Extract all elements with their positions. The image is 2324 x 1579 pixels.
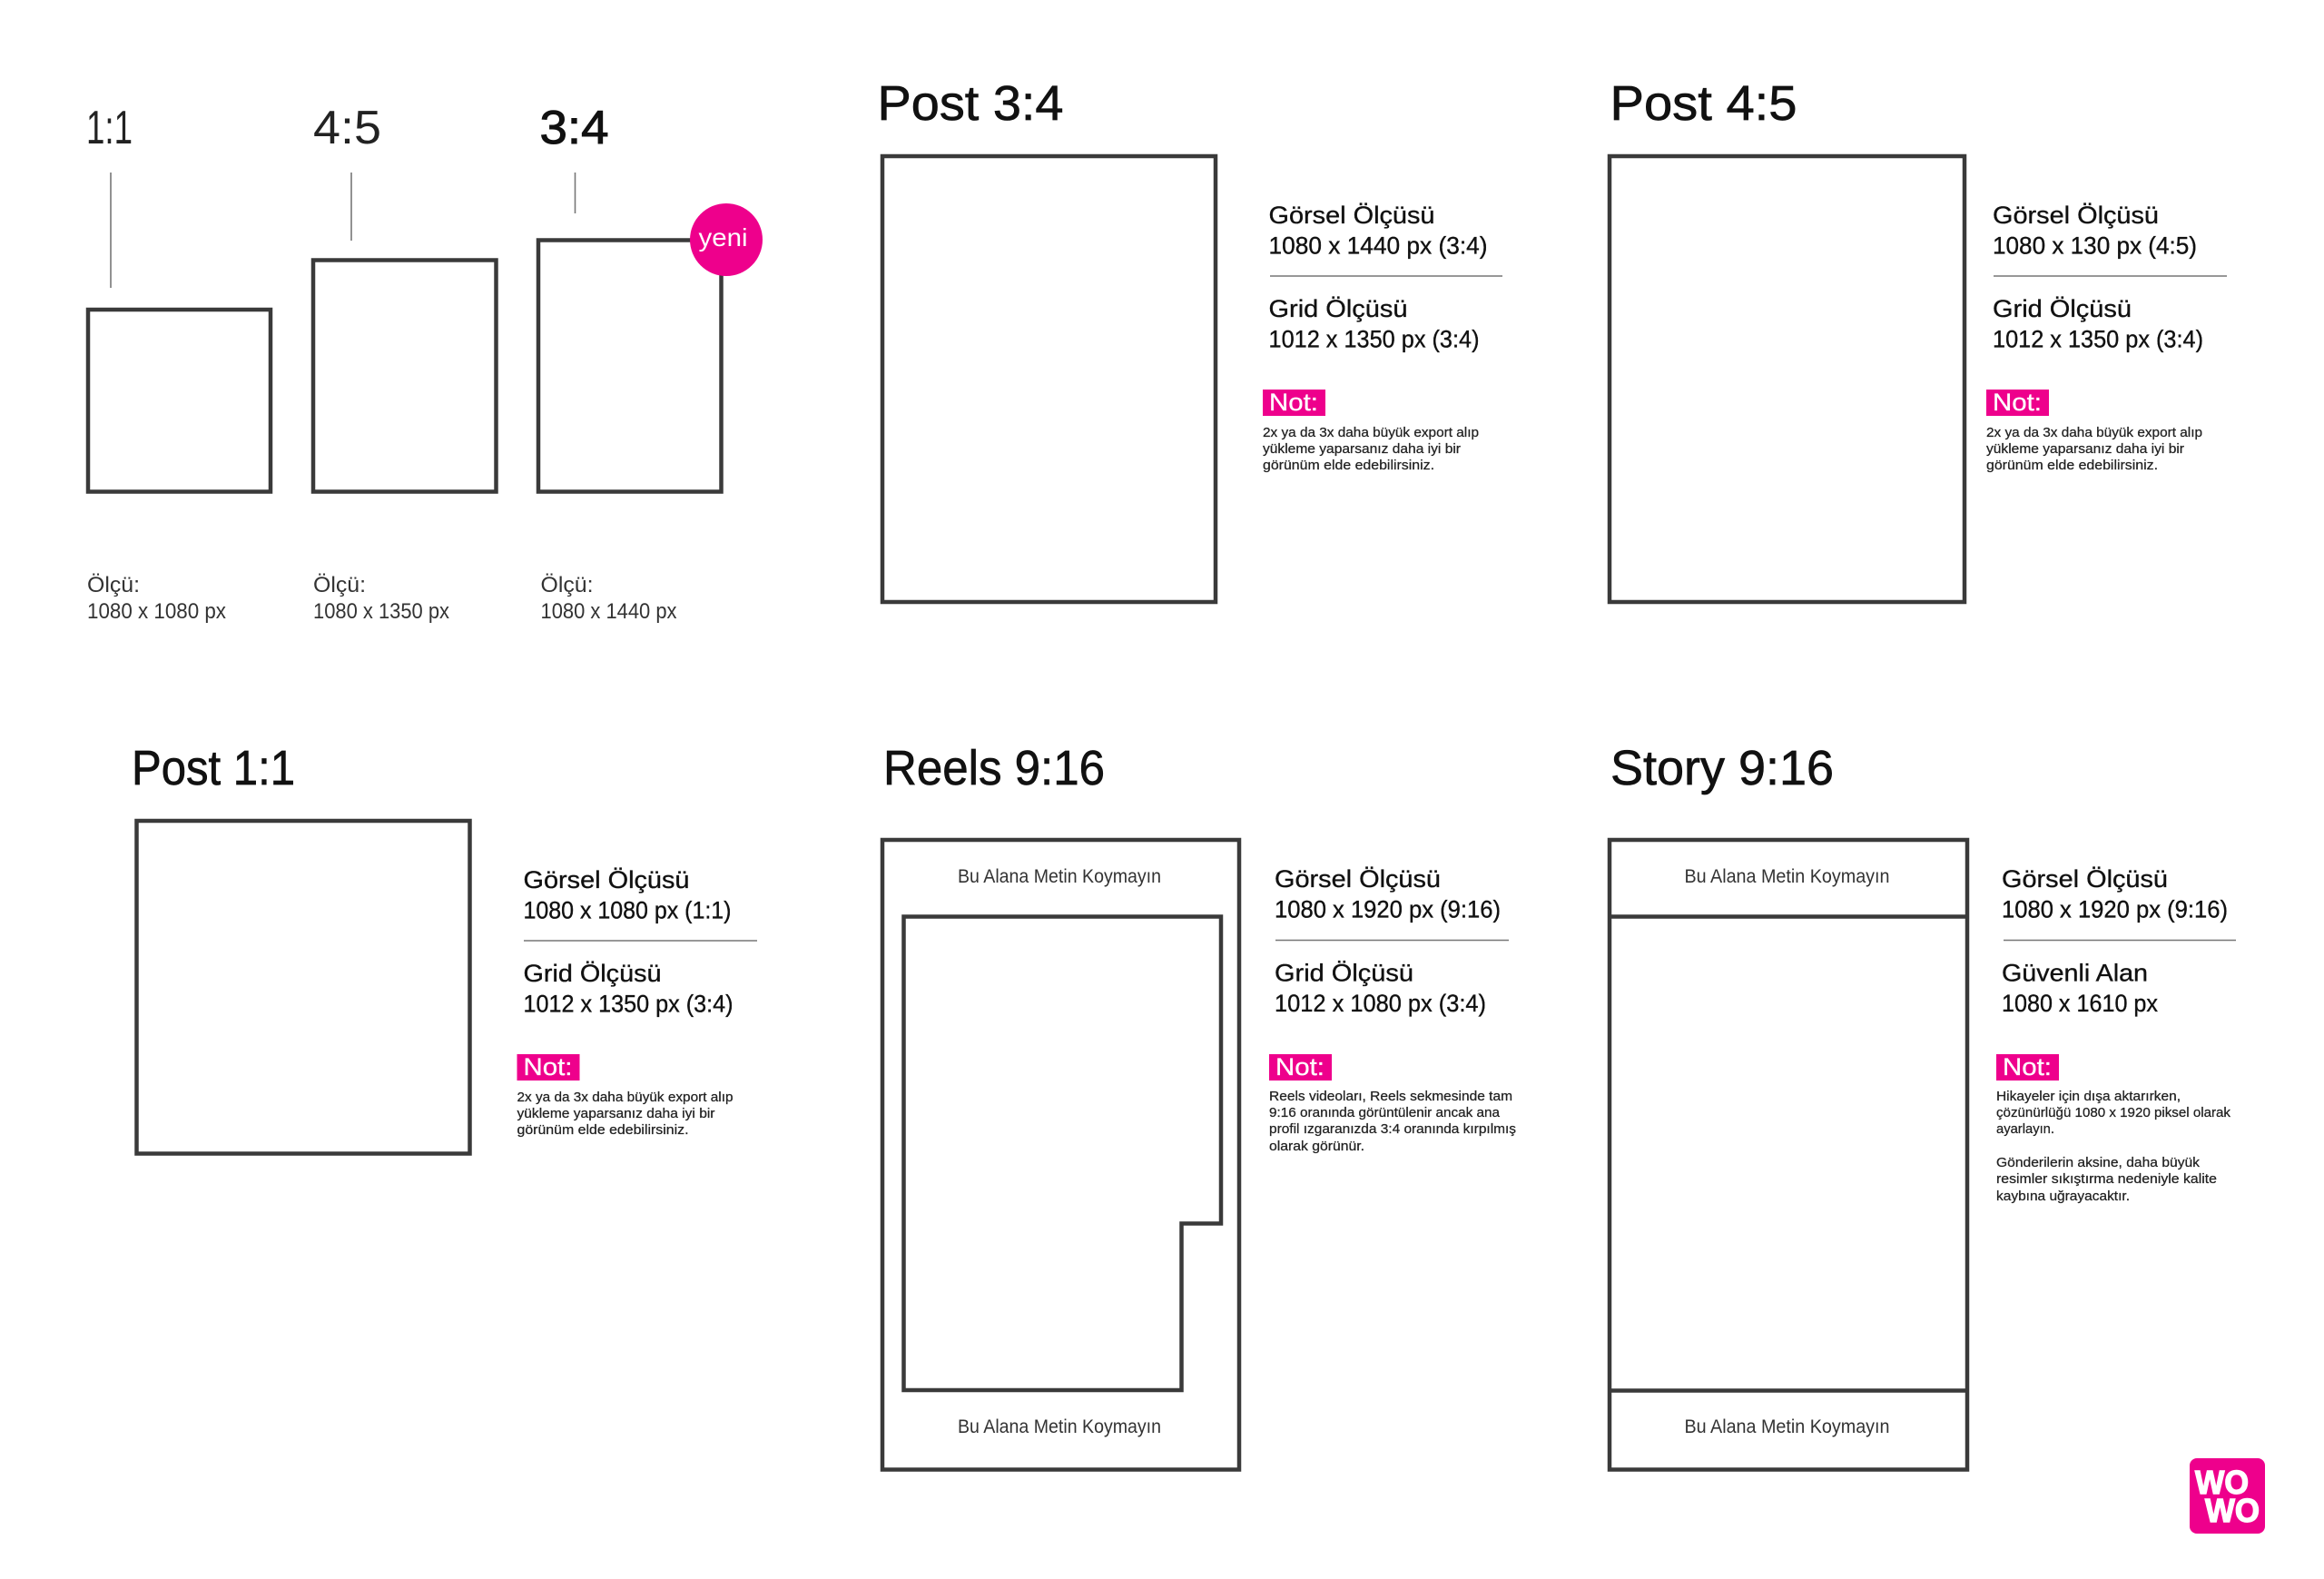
specs: Post 3:4 [1269,202,1502,352]
specs: Reels 9:16: Görsel Ölçüsü [1275,865,1441,893]
note: Story 9:16: Gönderilerin aksine, daha büyük [1996,1155,2201,1170]
specs: Post 4:5: 1012 x 1350 px (3:4) [1993,325,2203,352]
size text: 1:1 [87,573,226,624]
specs: Post 1:1: Görsel Ölçüsü [523,866,690,893]
note: Post 1:1: yükleme yaparsanız daha iyi bir [517,1106,715,1121]
note: Post 1:1: görünüm elde edebilirsiniz. [517,1122,688,1138]
badge: yeni [690,203,763,276]
note: Post 4:5: yükleme yaparsanız daha iyi bir [1986,441,2184,457]
frame: Reels safe area [904,917,1221,1390]
specs: Story 9:16: Güvenli Alan [2002,959,2148,986]
frame: Post 4:5 [1610,156,1965,602]
note: Reels 9:16: olarak görünür. [1269,1139,1364,1154]
note: Reels 9:16: 9:16 oranında görüntülenir ancak ana [1269,1105,1501,1120]
frame: Story safe area [1610,917,1967,1391]
specs: Post 4:5: Grid Ölçüsü [1993,295,2132,322]
note: Story 9:16: ayarlayın. [1996,1121,2054,1137]
specs: Post 1:1: 1080 x 1080 px (1:1) [523,897,732,924]
size text: 3:4: Ölçü: [541,573,594,597]
badge: yeni: yeni [699,223,748,252]
logo: WOWO: WO [2195,1464,2249,1501]
specs: Post 3:4: Grid Ölçüsü [1269,295,1407,322]
note: Reels 9:16: Not: [1275,1053,1324,1081]
size text: 4:5: 1080 x 1350 px [313,599,449,624]
note: Story 9:16: Not: [2003,1053,2052,1081]
size text: 1:1: 1080 x 1080 px [87,599,226,624]
size text: 3:4: 1080 x 1440 px [541,599,677,624]
caption: top safe zone: Bu Alana Metin Koymayın [958,866,1161,887]
note: Post 4:5: 2x ya da 3x daha büyük export alıp [1986,425,2202,440]
note: Post 3:4: yükleme yaparsanız daha iyi bir [1263,441,1461,457]
specs: Post 4:5: Görsel Ölçüsü [1993,202,2159,229]
panel: Post 1:1 [132,741,757,1153]
specs: Story 9:16: 1080 x 1920 px (9:16) [2002,895,2228,923]
note: Post 1:1: 2x ya da 3x daha büyük export alıp [517,1090,734,1105]
logo: WOWO [2190,1458,2265,1534]
specs: Reels 9:16 [1275,865,1509,1017]
note: Story 9:16: Hikayeler için dışa aktarırken, [1996,1089,2181,1104]
specs: Post 1:1: Grid Ölçüsü [523,960,661,987]
note: Story 9:16 [1996,1053,2230,1204]
note: Reels 9:16: profil ızgaranızda 3:4 oranında kırpılmış [1269,1121,1516,1137]
note: Post 1:1 [517,1053,734,1138]
specs: Post 3:4: 1012 x 1350 px (3:4) [1269,325,1480,352]
heading: 3:4: 3:4 [539,102,608,154]
size text: 3:4 [541,573,677,624]
note: Reels 9:16 [1269,1053,1516,1154]
specs: Post 3:4: 1080 x 1440 px (3:4) [1269,232,1487,260]
ratio 3:4 column [538,102,763,624]
specs: Post 1:1 [523,866,757,1017]
panel: Post 3:4 [877,76,1502,602]
note: Story 9:16: kaybına uğrayacaktır. [1996,1189,2130,1204]
heading: 1:1: 1:1 [86,102,133,154]
panel: Story 9:16 [1610,741,2236,1469]
specs: Story 9:16: 1080 x 1610 px [2002,990,2158,1017]
note: Post 1:1: Not: [523,1053,572,1081]
frame: 4:5 [313,260,496,492]
frame: Story outer [1610,840,1967,1469]
panel: aspect ratio overview [86,102,763,624]
frame: Post 1:1 [136,821,470,1153]
size text: 4:5 [313,573,449,624]
note: Story 9:16: resimler sıkıştırma nedeniyle kalite [1996,1171,2217,1187]
heading: Post 4:5: Post 4:5 [1610,76,1797,131]
heading: Reels 9:16: Reels 9:16 [883,741,1105,795]
heading: Story 9:16: Story 9:16 [1610,741,1834,795]
panel: Post 4:5 [1610,76,2227,602]
note: Post 4:5: Not: [1993,389,2042,416]
specs: Reels 9:16: Grid Ölçüsü [1275,959,1413,986]
frame: Reels outer [882,840,1239,1469]
specs: Post 4:5 [1993,202,2227,352]
note: Post 4:5: görünüm elde edebilirsiniz. [1986,458,2158,473]
heading: 4:5: 4:5 [313,102,381,154]
specs: Reels 9:16: 1012 x 1080 px (3:4) [1275,990,1486,1017]
note: Post 3:4: 2x ya da 3x daha büyük export alıp [1263,425,1479,440]
note: Post 4:5 [1986,389,2202,473]
frame: Post 3:4 [882,156,1216,602]
heading: Post 3:4: Post 3:4 [877,76,1064,131]
specs: Post 4:5: 1080 x 130 px (4:5) [1993,232,2197,260]
panel: Reels 9:16 [882,741,1516,1469]
caption: bottom safe zone: Bu Alana Metin Koymayın [958,1416,1161,1437]
note: Post 3:4 [1263,389,1479,473]
frame: 1:1 [88,310,271,492]
specs: Post 3:4: Görsel Ölçüsü [1269,202,1434,229]
caption: top safe zone: Bu Alana Metin Koymayın [1685,866,1890,887]
logo: WOWO: WO [2205,1492,2260,1529]
specs: Story 9:16 [2002,865,2236,1017]
ratio 1:1 column [86,102,271,624]
heading: Post 1:1: Post 1:1 [132,741,295,795]
ratio 4:5 column [313,102,496,624]
specs: Post 1:1: 1012 x 1350 px (3:4) [523,990,734,1017]
specs: Story 9:16: Görsel Ölçüsü [2002,865,2168,893]
note: Story 9:16: çözünürlüğü 1080 x 1920 piksel olarak [1996,1105,2230,1120]
note: Reels 9:16: Reels videoları, Reels sekmesinde tam [1269,1089,1512,1104]
size text: 4:5: Ölçü: [313,573,366,597]
caption: bottom safe zone: Bu Alana Metin Koymayın [1685,1416,1890,1437]
note: Post 3:4: görünüm elde edebilirsiniz. [1263,458,1434,473]
note: Post 3:4: Not: [1269,389,1318,416]
frame: 3:4 [538,240,721,492]
size text: 1:1: Ölçü: [87,573,140,597]
specs: Reels 9:16: 1080 x 1920 px (9:16) [1275,895,1501,923]
